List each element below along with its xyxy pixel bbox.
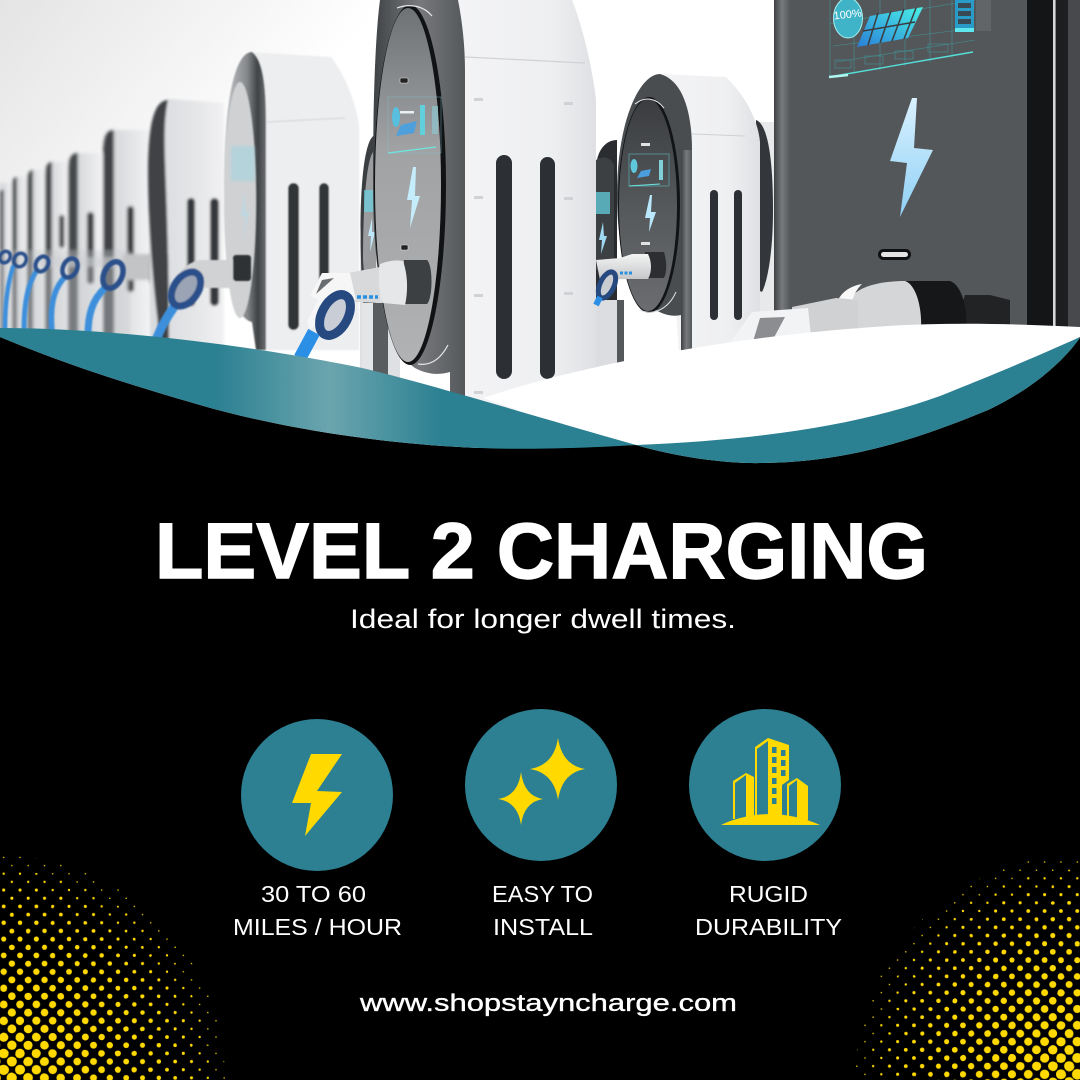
label: 30 to 60 miles per hour: 30 TO 60 xyxy=(261,881,366,907)
title: LEVEL 2 CHARGING xyxy=(155,506,928,595)
feature: rugged durability xyxy=(689,709,842,940)
black lower panel xyxy=(0,337,1080,1080)
charger A, central sharp unit xyxy=(300,0,596,410)
icon: lightning bolt in circle xyxy=(241,719,393,871)
B body xyxy=(660,74,760,370)
B lightning xyxy=(645,195,656,232)
label: rugid durability: DURABILITY xyxy=(695,914,842,940)
A body xyxy=(450,0,596,410)
B HUD xyxy=(629,154,669,186)
label: rugid durability: RUGID xyxy=(729,881,808,907)
D lightning xyxy=(890,98,933,217)
icon: buildings in circle xyxy=(689,709,841,861)
blue cables and handles on far chargers xyxy=(0,249,251,340)
feature: charging speed xyxy=(233,719,402,940)
B bezel xyxy=(617,74,692,360)
halftone dots: bottom right xyxy=(855,855,1080,1080)
A screen xyxy=(374,5,446,365)
D screen panel xyxy=(790,0,1027,345)
website url: www.shopstayncharge.com xyxy=(359,990,737,1017)
charger C, far right of B xyxy=(752,120,775,330)
label: easy to install: EASY TO xyxy=(492,881,593,907)
charger E, softly blurred xyxy=(224,52,359,350)
label: easy to install xyxy=(492,881,593,940)
A plug xyxy=(307,260,432,330)
A lightning xyxy=(407,167,420,228)
photo: row of EV chargers xyxy=(0,0,1080,470)
HUD percent: 100% xyxy=(833,8,863,22)
icon: sparkles in circle xyxy=(465,709,617,861)
B slots xyxy=(710,190,718,320)
A handle loop xyxy=(313,289,357,341)
charger F, blurred xyxy=(148,99,224,345)
charger B xyxy=(595,74,760,370)
halftone dots: bottom left xyxy=(0,855,225,1080)
label: easy to install: INSTALL xyxy=(493,914,593,940)
D casing xyxy=(774,0,1080,345)
photo backdrop xyxy=(0,0,1080,470)
teal wave: left swoosh with highlight xyxy=(0,328,636,449)
label: 30 to 60 miles per hour: MILES / HOUR xyxy=(233,914,402,940)
A HUD xyxy=(388,97,441,153)
B plug xyxy=(645,252,666,278)
label: rugid durability xyxy=(695,881,842,940)
D status pill xyxy=(878,249,911,260)
D plug xyxy=(728,281,1010,345)
white wave xyxy=(483,324,1080,445)
A slots xyxy=(496,155,512,379)
charger behind A xyxy=(360,135,400,403)
feature: easy install xyxy=(465,709,617,940)
subtitle: Ideal for longer dwell times. xyxy=(350,604,736,634)
A bezel xyxy=(373,0,465,410)
D HUD xyxy=(829,0,991,78)
charger D, large foreground unit xyxy=(728,0,1080,345)
charger behind B xyxy=(596,140,624,400)
B screen xyxy=(618,97,680,313)
A blue cable xyxy=(300,332,314,358)
far chargers, blurred xyxy=(0,130,162,340)
label: 30 to 60 miles per hour xyxy=(233,881,402,940)
teal wave: right lower band xyxy=(600,330,1080,463)
